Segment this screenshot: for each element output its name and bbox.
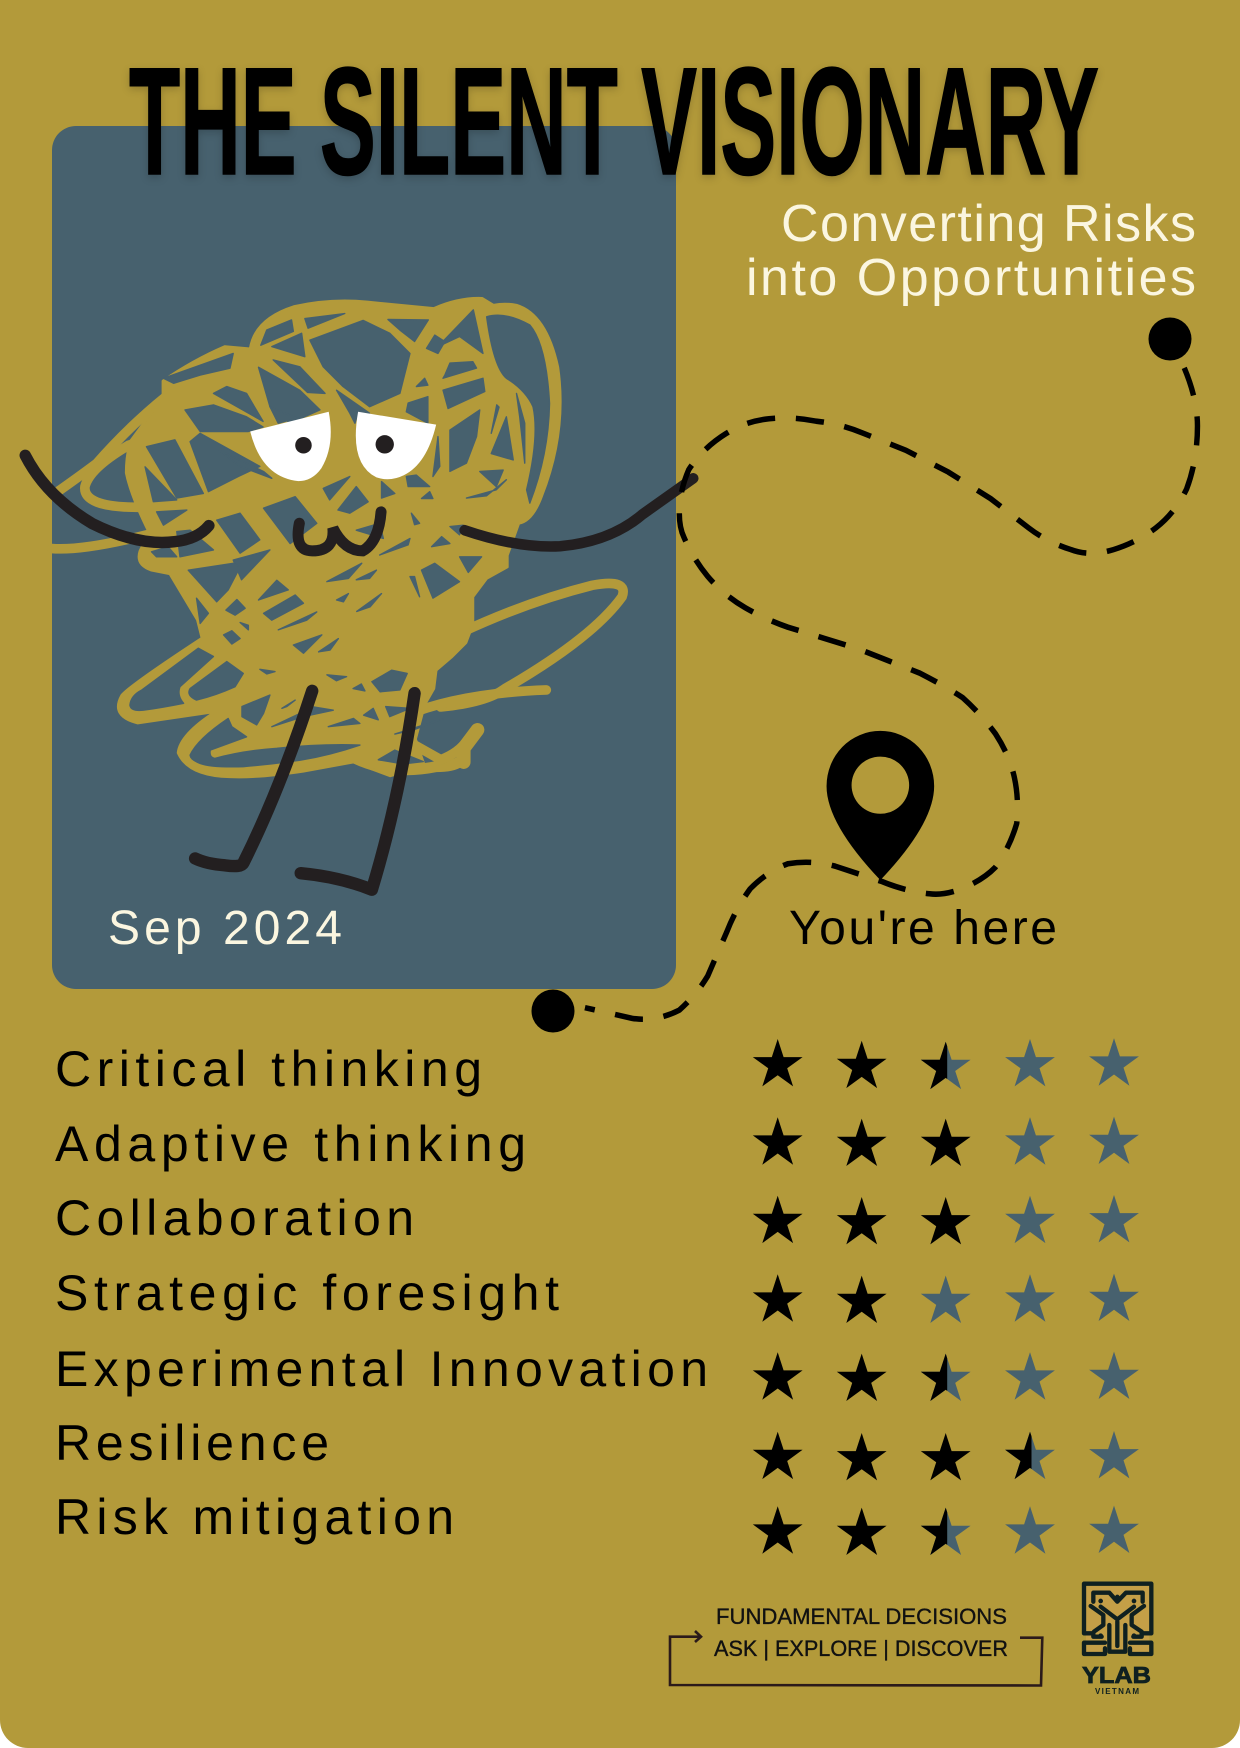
dashed journey path xyxy=(585,368,1197,1019)
subtitle: into Opportunities xyxy=(746,249,1196,307)
panel: star ratings xyxy=(753,1038,1139,1555)
panel: skill labels: Resilience xyxy=(55,1415,329,1471)
panel: skill labels xyxy=(55,1041,708,1545)
logo mark xyxy=(1084,1584,1151,1654)
row: risk mitigation 2.5 stars xyxy=(753,1506,1139,1555)
logo subtext: VIETNAM xyxy=(1095,1687,1139,1696)
scribble gaps xyxy=(130,310,550,767)
tagline: FUNDAMENTAL DECISIONS xyxy=(716,1604,1007,1629)
logo: YLAB Vietnam xyxy=(1082,1584,1151,1696)
subtitle xyxy=(746,195,1196,307)
panel: skill labels: Adaptive thinking xyxy=(55,1116,526,1172)
panel: skill labels: Collaboration xyxy=(55,1190,414,1246)
tagline xyxy=(714,1604,1008,1661)
row: collaboration 3 stars xyxy=(753,1195,1139,1244)
tagline: ASK | EXPLORE | DISCOVER xyxy=(714,1636,1008,1661)
row: critical thinking 2.5 stars xyxy=(753,1038,1139,1089)
row: experimental innovation 2.5 stars xyxy=(753,1352,1139,1401)
icon: location pin xyxy=(827,731,934,880)
panel: skill labels: Critical thinking xyxy=(55,1041,482,1097)
arrow frame xyxy=(670,1631,1042,1686)
right eye xyxy=(356,412,436,479)
subtitle: Converting Risks xyxy=(781,195,1196,253)
illustration: scribble character xyxy=(25,298,693,890)
row: resilience 3.5 stars xyxy=(753,1431,1139,1480)
date label: Sep 2024 xyxy=(108,902,342,955)
path end dot xyxy=(532,990,574,1032)
scribble silhouette xyxy=(118,298,560,777)
panel: portrait card xyxy=(52,126,676,989)
right leg xyxy=(301,693,415,890)
row: adaptive thinking 3 stars xyxy=(753,1117,1139,1166)
panel: skill labels: Risk mitigation xyxy=(55,1489,454,1545)
scribble outer strokes xyxy=(52,397,623,770)
panel: skill labels: Strategic foresight xyxy=(55,1265,559,1321)
left leg xyxy=(195,691,312,866)
path start dot xyxy=(1148,318,1192,360)
right arm xyxy=(465,478,693,547)
logo wordmark: YLAB xyxy=(1082,1662,1151,1688)
you're here label: You're here xyxy=(789,902,1057,955)
left arm xyxy=(25,455,209,542)
row: strategic foresight 2 stars xyxy=(753,1274,1139,1323)
panel: skill labels: Experimental Innovation xyxy=(55,1341,708,1397)
left eye xyxy=(250,412,331,481)
mouth xyxy=(298,512,381,551)
